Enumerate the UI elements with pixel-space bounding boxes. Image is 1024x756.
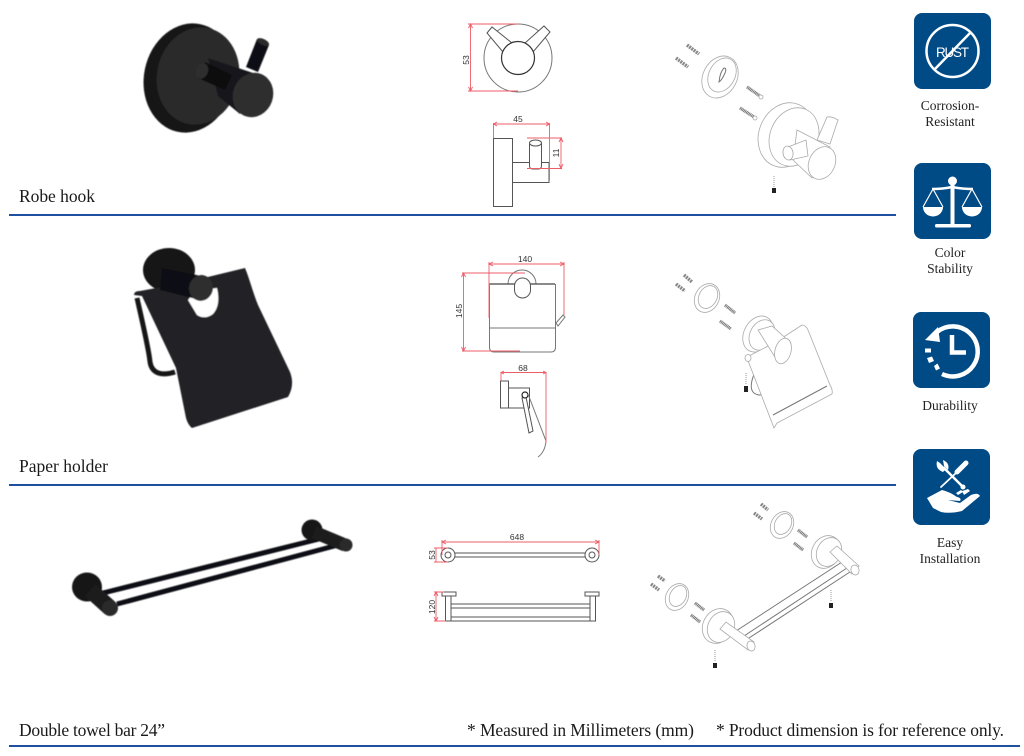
divider: paper holder xyxy=(9,484,896,486)
panel: robe hook xyxy=(19,15,841,206)
icon: clock with reverse arrow xyxy=(913,312,990,388)
drawing: paper holder side view xyxy=(500,363,546,457)
drawing: towel bar side view xyxy=(427,592,599,621)
exploded view: robe hook xyxy=(676,45,841,193)
feature: corrosion-resistant xyxy=(914,13,991,129)
label: corrosion-resistant: Corrosion- xyxy=(921,98,980,113)
drawing: towel bar top view: 53 xyxy=(427,550,437,560)
drawing: towel bar top view xyxy=(427,532,599,562)
drawing: robe hook front view: 53 xyxy=(461,55,471,65)
note: measured in millimeters: * Measured in Millimeters (mm) xyxy=(467,720,694,740)
drawing: paper holder side view: 68 xyxy=(518,363,528,373)
heading: paper holder: Paper holder xyxy=(19,456,108,476)
label: easy installation: Installation xyxy=(920,551,981,566)
drawing: towel bar top view: 648 xyxy=(510,532,524,542)
drawing: paper holder front view: 140 xyxy=(518,254,532,264)
exploded view: paper holder xyxy=(676,275,832,428)
feature: easy installation xyxy=(913,449,990,566)
label: easy installation: Easy xyxy=(937,535,963,550)
heading: double towel bar: Double towel bar 24” xyxy=(19,720,165,740)
drawing: towel bar side view: 120 xyxy=(427,600,437,614)
label: durability: Durability xyxy=(922,398,978,413)
label: color stability: Stability xyxy=(927,261,973,276)
label: corrosion-resistant: Resistant xyxy=(925,114,975,129)
feature: durability xyxy=(913,312,990,413)
note: reference only: * Product dimension is for reference only. xyxy=(716,720,1004,740)
photo: robe hook xyxy=(134,15,279,141)
drawing: robe hook side view: 11 xyxy=(551,148,561,157)
icon: no rust: RUST xyxy=(936,45,969,60)
feature: color stability xyxy=(914,163,991,276)
divider: bottom xyxy=(9,745,1020,747)
icon: tools over hand xyxy=(913,449,990,525)
drawing: robe hook side view xyxy=(494,114,563,206)
drawing: robe hook front view xyxy=(461,24,552,92)
divider: robe hook xyxy=(9,214,896,216)
heading: robe hook: Robe hook xyxy=(19,186,95,206)
exploded view: towel bar xyxy=(651,504,860,668)
panel: double towel bar xyxy=(19,504,860,740)
drawing: paper holder front view: 145 xyxy=(454,304,464,318)
icon: balance scale xyxy=(914,163,991,239)
label: color stability: Color xyxy=(935,245,966,260)
photo: paper holder xyxy=(134,248,292,428)
drawing: robe hook side view: 45 xyxy=(513,114,523,124)
drawing: paper holder front view xyxy=(454,254,565,352)
panel: paper holder xyxy=(19,248,832,476)
photo: double towel bar xyxy=(72,520,352,616)
